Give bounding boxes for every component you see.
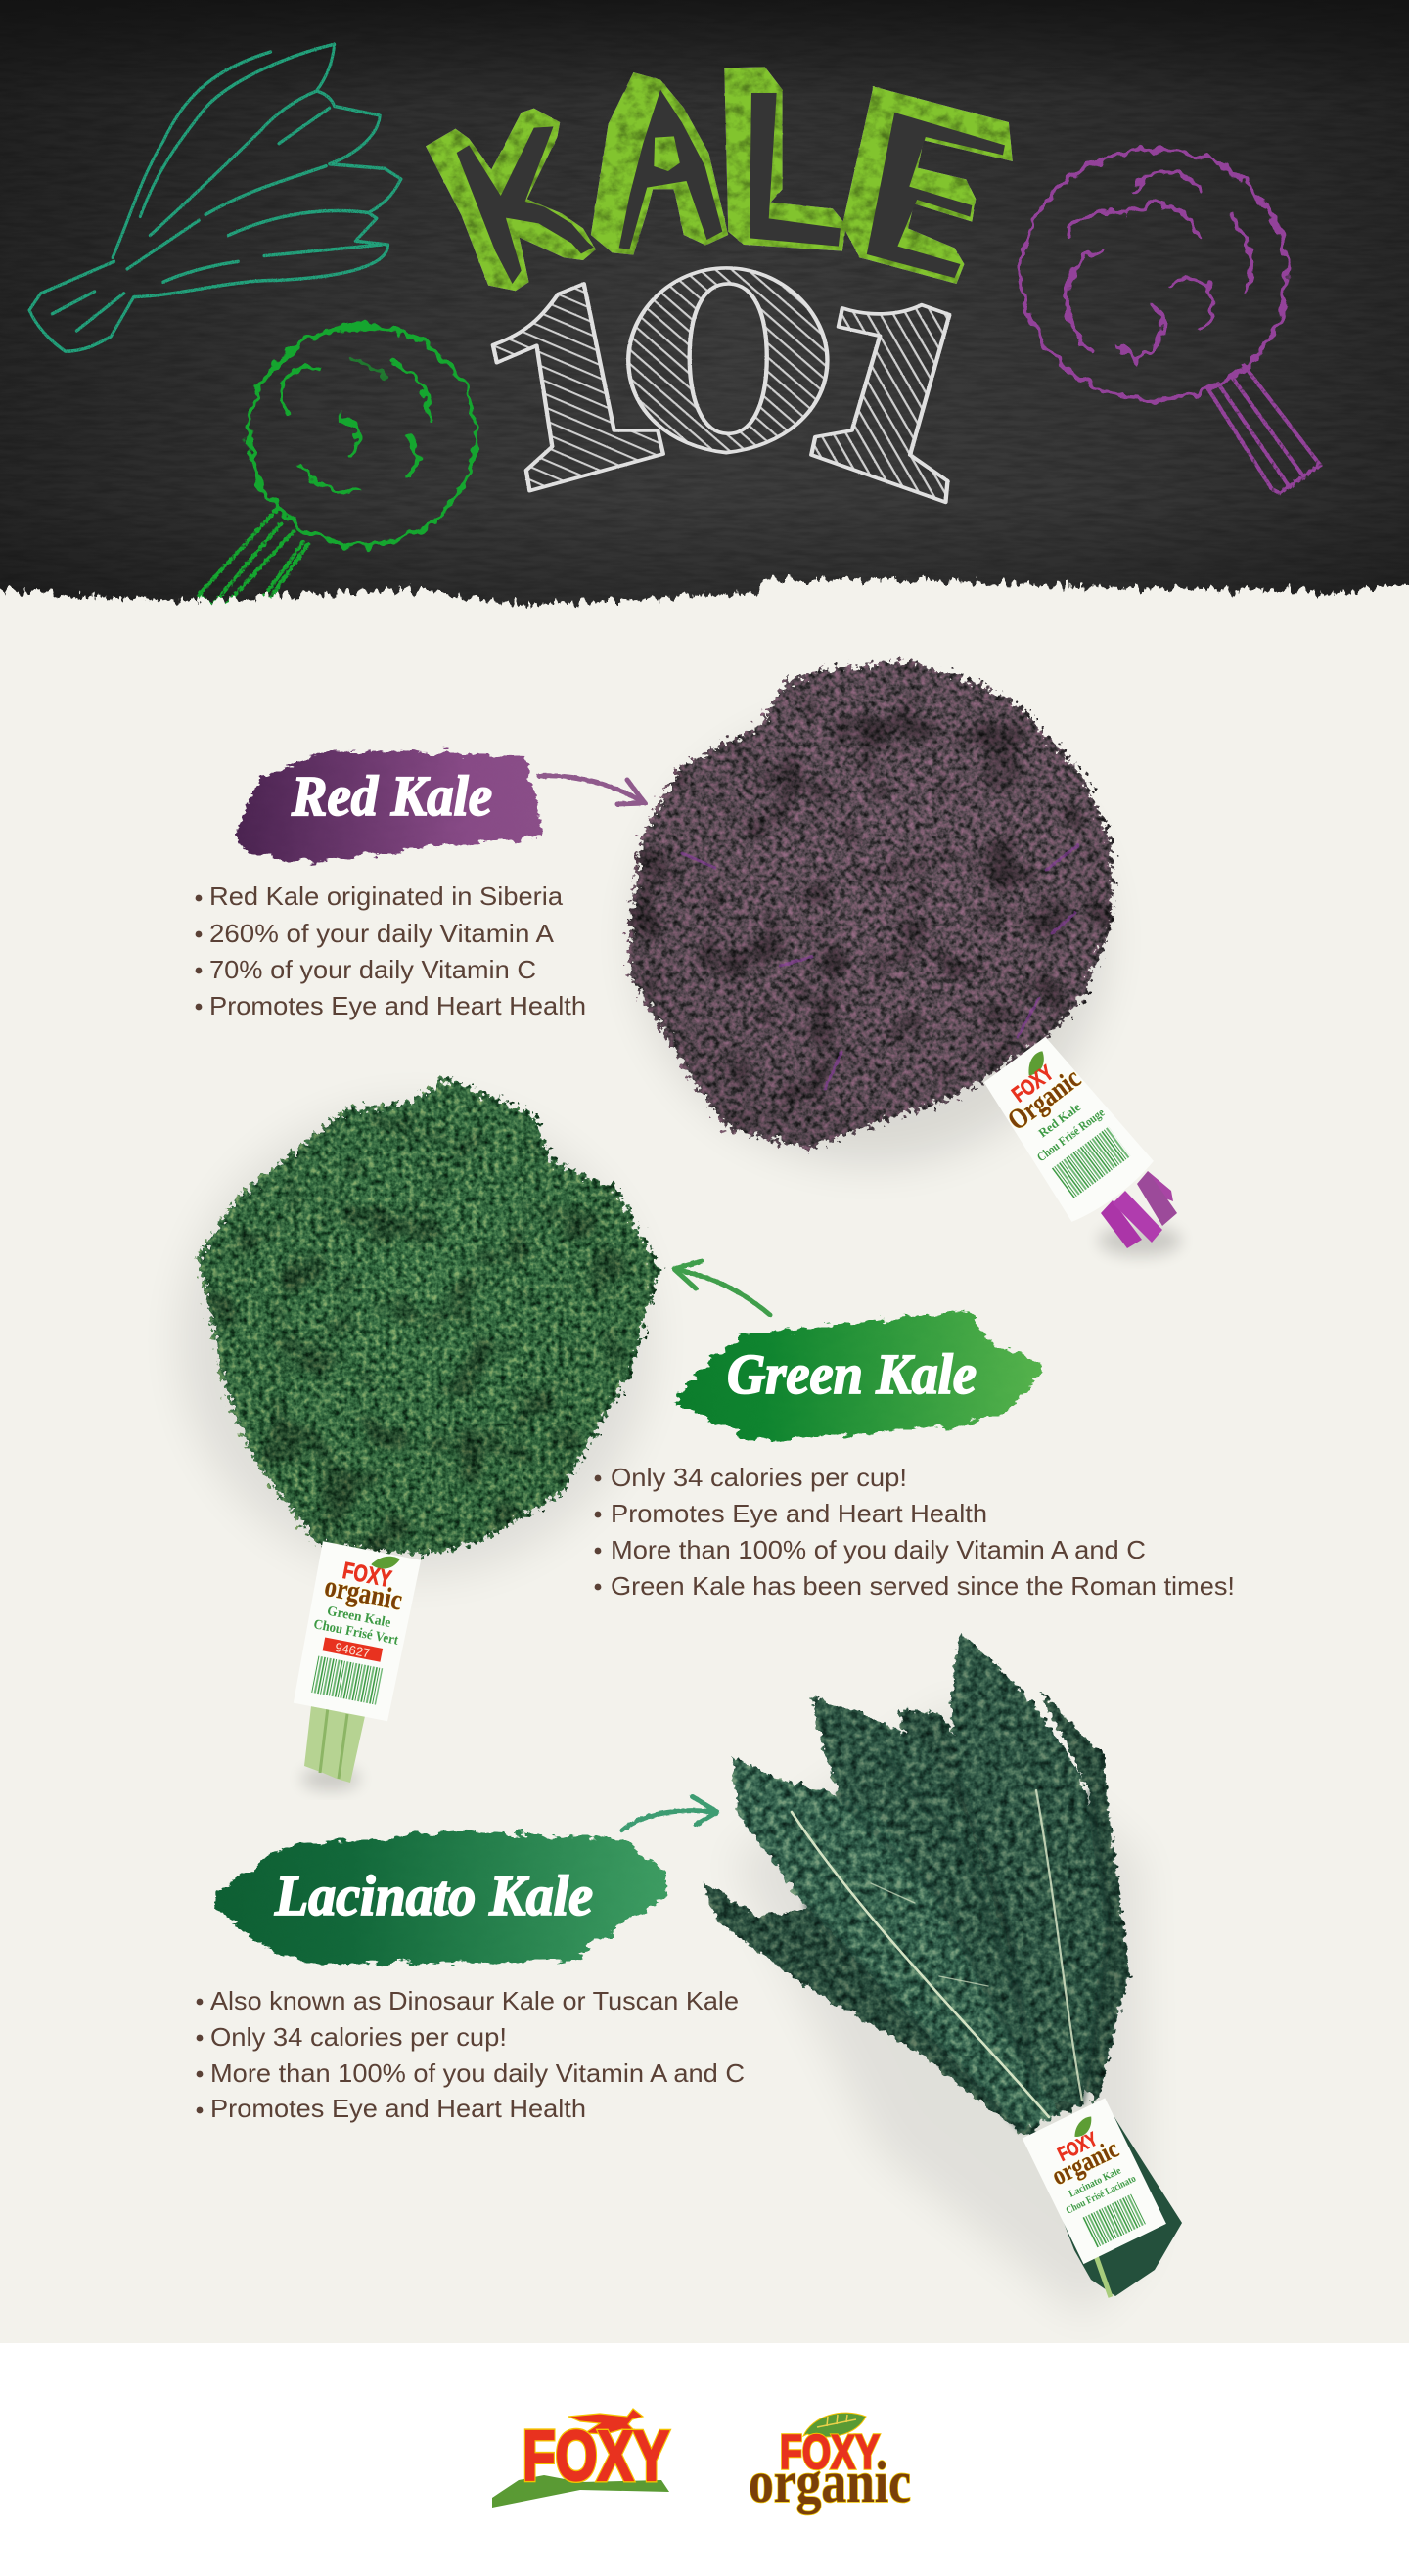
kale bunch label: green kale: 94627 bbox=[334, 1640, 371, 1660]
torn paper edge bbox=[0, 579, 1409, 655]
panel: lacinato kale bbox=[197, 1631, 1182, 2319]
leaf midribs bbox=[792, 1790, 1082, 2117]
logo: Foxy: FOXY bbox=[523, 2418, 669, 2496]
logo: Foxy Organic bbox=[749, 2413, 911, 2514]
panel: footer bbox=[0, 2343, 1409, 2576]
photo: lacinato kale leaves bbox=[702, 1631, 1129, 2135]
facts: green kale: Promotes Eye and Heart Health bbox=[611, 1499, 987, 1528]
kale bunch label: red kale: FOXY bbox=[1007, 1061, 1058, 1107]
facts: lacinato kale: Also known as Dinosaur Kale or Tuscan Kale bbox=[210, 1986, 739, 2015]
heading pill: Red Kale: Red Kale bbox=[291, 764, 492, 828]
chalk drawing: red kale bbox=[1022, 150, 1320, 493]
kale bunch label: lacinato kale: organic bbox=[1047, 2134, 1123, 2191]
kale bunch label: green kale: FOXY bbox=[341, 1558, 393, 1593]
kale bunch label: red kale: Red Kale bbox=[1036, 1100, 1083, 1140]
kale bunch label: green kale: Chou Frisé Vert bbox=[312, 1617, 400, 1649]
facts: green kale: Only 34 calories per cup! bbox=[611, 1463, 907, 1492]
shadow: lacinato kale bbox=[734, 1702, 1145, 2319]
kale bunch label: green kale bbox=[292, 1541, 421, 1790]
arrow: red label to red kale bbox=[539, 776, 645, 804]
arrow: green label to green kale bbox=[674, 1261, 770, 1315]
kale bunch label: red kale: Chou Frisé Rouge bbox=[1034, 1106, 1108, 1164]
facts: red kale: Red Kale originated in Siberia bbox=[209, 881, 564, 911]
facts: lacinato kale: More than 100% of you daily Vitamin A and C bbox=[210, 2058, 745, 2088]
heading pill: Green Kale bbox=[674, 1311, 1040, 1441]
kale bunch label: lacinato kale: Chou Frisé Lacinato bbox=[1065, 2174, 1138, 2217]
chalk drawing: green kale bbox=[199, 326, 476, 606]
facts: green kale: Green Kale has been served since the Roman times! bbox=[611, 1571, 1235, 1601]
heading pill: Lacinato Kale bbox=[216, 1830, 665, 1965]
logo: Foxy: FOXY bbox=[523, 2418, 669, 2496]
facts: green kale: More than 100% of you daily Vitamin A and C bbox=[611, 1535, 1146, 1564]
title: KALE bbox=[426, 67, 1013, 291]
facts: red kale: 70% of your daily Vitamin C bbox=[209, 955, 536, 984]
kale bunch label: lacinato kale: Lacinato Kale bbox=[1068, 2165, 1123, 2200]
facts: red kale bbox=[196, 881, 586, 1020]
arrow: lacinato label to lacinato kale bbox=[622, 1796, 717, 1830]
heading pill: Green Kale: Green Kale bbox=[727, 1342, 977, 1406]
title: 101 bbox=[493, 268, 949, 502]
facts: lacinato kale: Promotes Eye and Heart Health bbox=[210, 2094, 586, 2123]
facts: red kale: 260% of your daily Vitamin A bbox=[209, 919, 555, 948]
kale bunch label: red kale bbox=[974, 1029, 1181, 1256]
facts: red kale: Promotes Eye and Heart Health bbox=[209, 991, 586, 1020]
chalkboard surface bbox=[0, 0, 1409, 626]
letters in green chalk bbox=[426, 67, 1013, 291]
panel: chalkboard header bbox=[0, 0, 1409, 655]
logo: Foxy Organic: organic bbox=[749, 2450, 911, 2514]
shadow: red kale bbox=[636, 714, 1106, 1164]
kale bunch label: lacinato kale: FOXY bbox=[1055, 2128, 1102, 2166]
heading pill: Red Kale bbox=[235, 750, 543, 863]
logo: Foxy Organic: FOXY bbox=[780, 2426, 880, 2479]
panel: green kale bbox=[181, 1078, 1235, 1790]
kale bunch label: lacinato kale bbox=[1023, 2098, 1166, 2297]
panel: red kale bbox=[196, 661, 1181, 1256]
chalk drawing: lacinato kale bbox=[29, 44, 401, 351]
bunch base: lacinato kale stems bbox=[1032, 2103, 1182, 2296]
letter faces bbox=[457, 90, 1005, 284]
kale bunch label: red kale: Organic bbox=[1002, 1062, 1087, 1137]
facts: green kale bbox=[595, 1463, 1235, 1601]
heading pill: Lacinato Kale: Lacinato Kale bbox=[274, 1864, 593, 1927]
leaf overlaps bbox=[804, 1751, 1109, 2131]
shadow: green kale bbox=[181, 1106, 651, 1575]
photo: red kale head bbox=[630, 661, 1114, 1149]
facts: lacinato kale bbox=[197, 1986, 745, 2123]
logo: Foxy Organic: FOXY bbox=[780, 2426, 880, 2479]
red kale purple veins bbox=[682, 845, 1078, 1089]
kale bunch label: green kale: Green Kale bbox=[326, 1604, 392, 1631]
logo: Foxy bbox=[492, 2409, 669, 2508]
photo: green kale head bbox=[198, 1078, 659, 1555]
kale bunch label: green kale: organic bbox=[322, 1570, 405, 1617]
facts: lacinato kale: Only 34 calories per cup! bbox=[210, 2022, 507, 2052]
